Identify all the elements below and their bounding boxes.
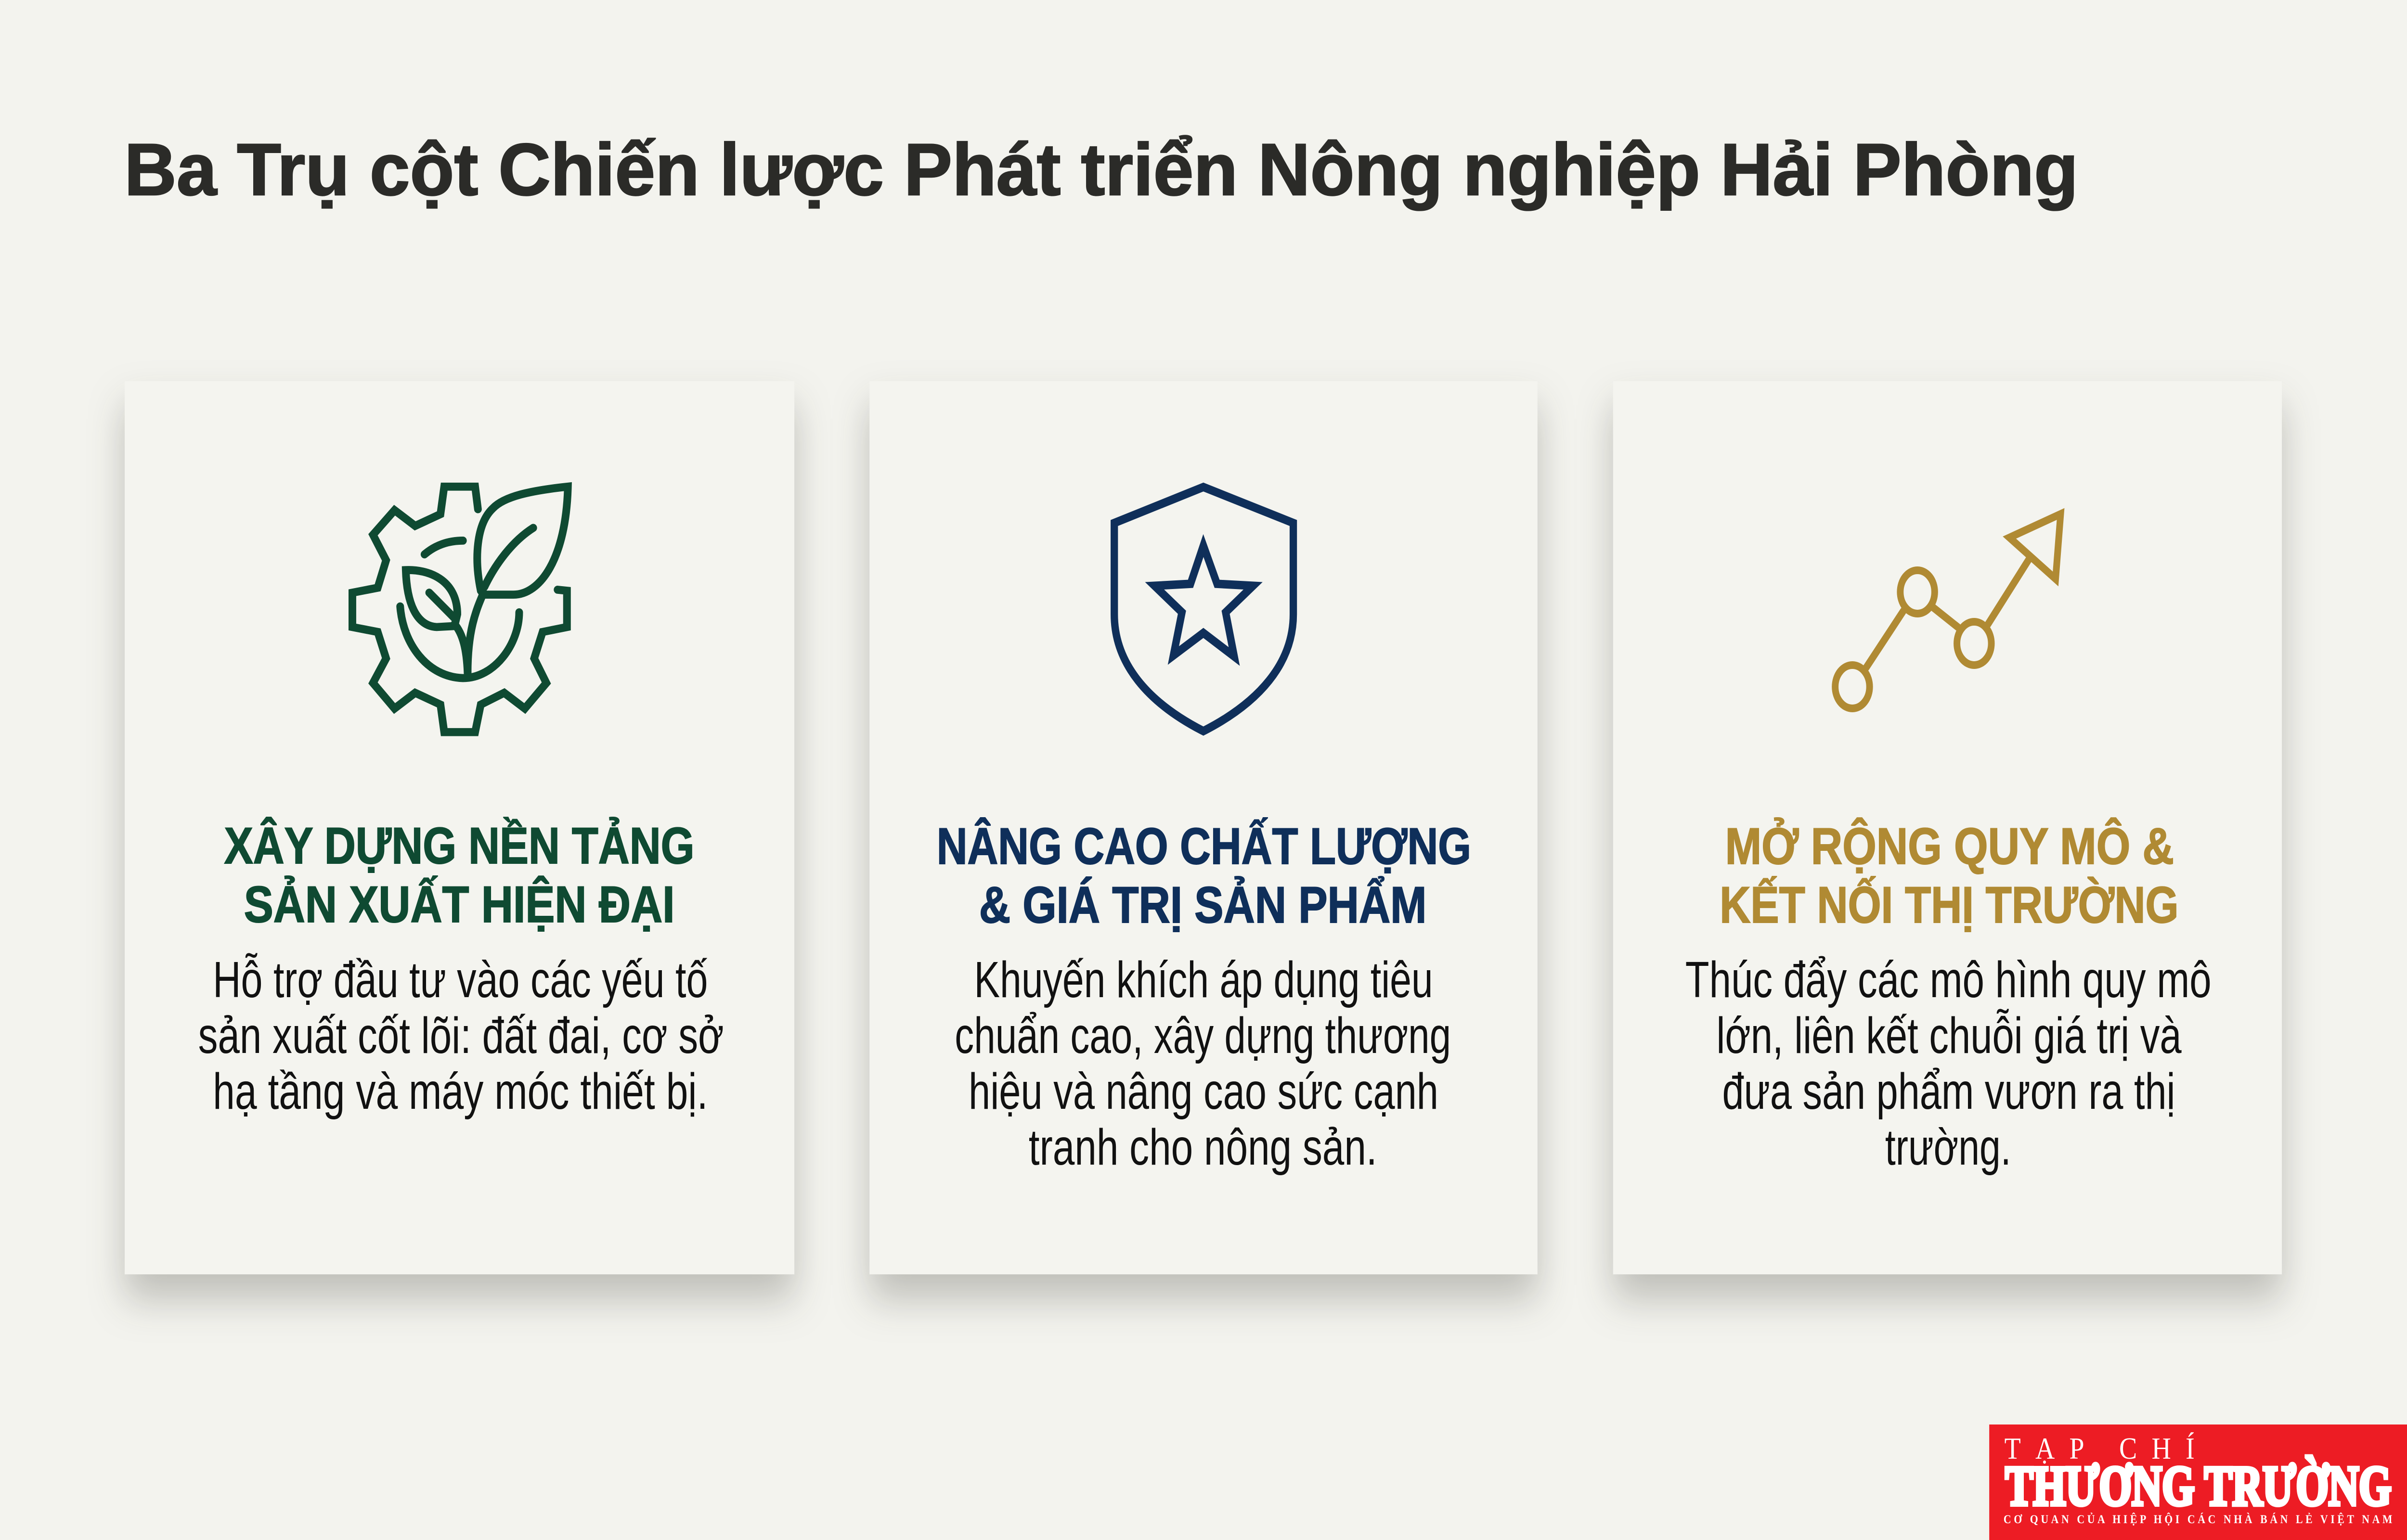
heading bbox=[937, 817, 1471, 934]
heading: KẾT NỐI THỊ TRƯỜNG bbox=[1720, 876, 2179, 934]
panel: mở rộng quy mô & kết nối thị trường bbox=[1613, 381, 2282, 1274]
heading: SẢN XUẤT HIỆN ĐẠI bbox=[244, 875, 675, 933]
logo: Tạp chí Thương Trường bbox=[1989, 1424, 2407, 1540]
heading: & GIÁ TRỊ SẢN PHẨM bbox=[979, 876, 1427, 934]
body text: chuẩn cao, xây dựng thương bbox=[955, 1007, 1451, 1064]
icon: gear with leaves bbox=[352, 487, 568, 732]
logo line: cơ quan: CƠ QUAN CỦA HIỆP HỘI CÁC NHÀ BÁN LẺ VIỆT NAM bbox=[2004, 1513, 2392, 1526]
body text: sản xuất cốt lõi: đất đai, cơ sở bbox=[198, 1007, 724, 1064]
body text: Khuyến khích áp dụng tiêu bbox=[974, 951, 1433, 1008]
body text: trường. bbox=[1885, 1119, 2011, 1176]
logo line: tạp chí: TẠP CHÍ bbox=[2005, 1431, 2195, 1465]
body text: hiệu và nâng cao sức cạnh bbox=[969, 1063, 1438, 1120]
body text: Thúc đẩy các mô hình quy mô bbox=[1685, 951, 2212, 1008]
body text: hạ tầng và máy móc thiết bị. bbox=[213, 1063, 708, 1120]
body text bbox=[1685, 951, 2212, 1176]
body text: đưa sản phẩm vươn ra thị bbox=[1722, 1063, 2175, 1120]
heading bbox=[1720, 818, 2179, 934]
title: Ba Trụ cột Chiến lược Phát triển Nông nghiệp Hải Phòng bbox=[124, 129, 2078, 211]
body text: lớn, liên kết chuỗi giá trị và bbox=[1716, 1007, 2182, 1064]
heading bbox=[224, 817, 695, 933]
body text: tranh cho nông sản. bbox=[1029, 1119, 1377, 1176]
body text bbox=[955, 951, 1451, 1176]
heading: XÂY DỰNG NỀN TẢNG bbox=[224, 817, 695, 874]
body text bbox=[198, 951, 724, 1120]
body text: Hỗ trợ đầu tư vào các yếu tố bbox=[213, 951, 708, 1008]
heading: NÂNG CAO CHẤT LƯỢNG bbox=[937, 817, 1471, 875]
panel: xây dựng nền tảng sản xuất hiện đại bbox=[125, 381, 794, 1274]
panel: nâng cao chất lượng & giá trị sản phẩm bbox=[869, 381, 1538, 1274]
icon: rising line with nodes and arrow bbox=[1835, 514, 2060, 708]
icon: shield with star bbox=[1114, 487, 1294, 731]
heading: MỞ RỘNG QUY MÔ & bbox=[1725, 818, 2174, 875]
